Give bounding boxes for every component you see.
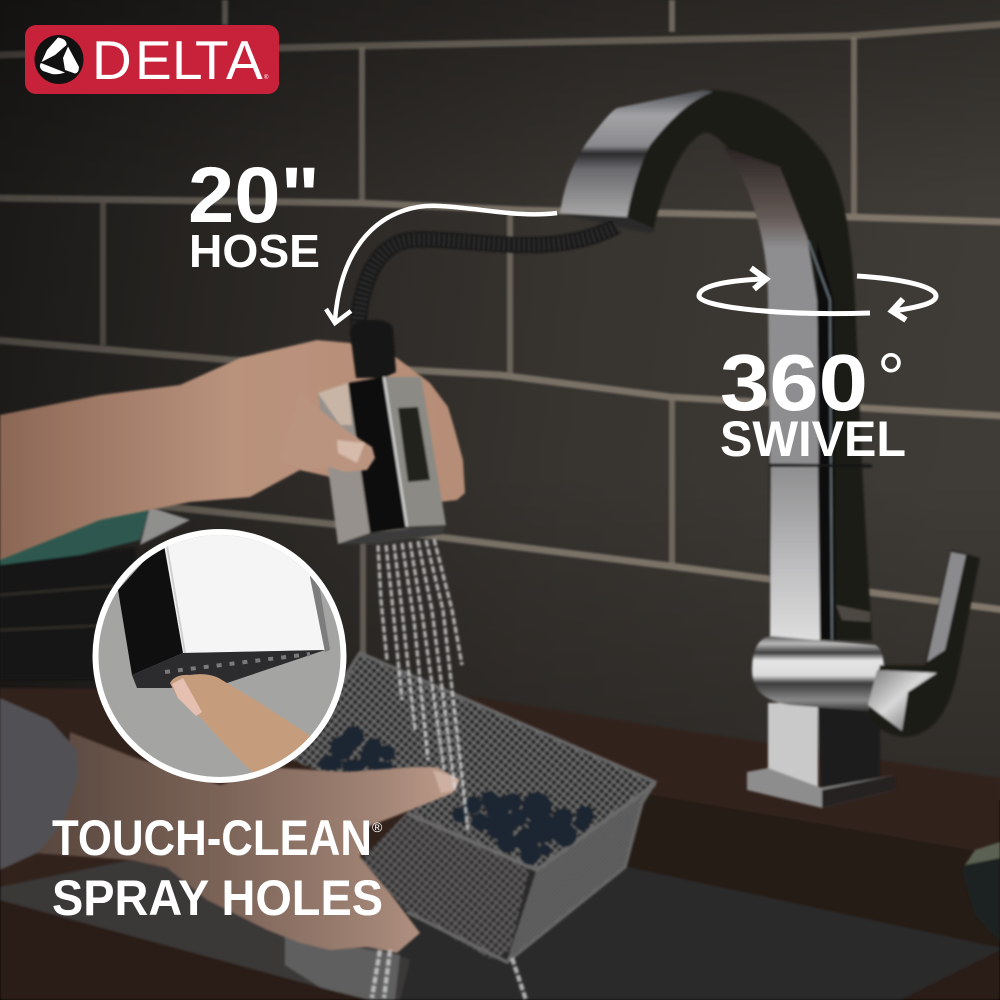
thumb xyxy=(280,392,375,472)
spray head underside xyxy=(132,650,325,688)
finger xyxy=(170,674,310,772)
callout: 360 degree swivel: SWIVEL xyxy=(720,411,906,467)
sleeve xyxy=(0,698,78,870)
thumbnail xyxy=(337,440,365,463)
sprayer nozzle rim xyxy=(338,525,446,544)
tile wall background xyxy=(0,0,1000,800)
fingernail xyxy=(172,678,202,716)
faucet spout head xyxy=(560,90,713,217)
arrow: swivel rotation xyxy=(699,268,936,320)
lower hand xyxy=(33,732,460,953)
arrow: hose reach xyxy=(326,206,557,323)
sprayer black face xyxy=(348,377,407,533)
faucet handle collar xyxy=(868,670,937,731)
wooden counter and sink xyxy=(0,688,1000,1000)
callout: touch-clean spray holes: TOUCH-CLEAN xyxy=(52,810,372,866)
hose xyxy=(358,226,617,325)
callout: touch-clean spray holes: ® xyxy=(372,819,383,835)
sprayer collar xyxy=(350,320,396,378)
Delta logo badge xyxy=(25,25,279,94)
callout: 360 degree swivel: 360 xyxy=(720,338,868,427)
faucet wall reflection xyxy=(836,605,870,622)
spray head dark face xyxy=(118,540,183,675)
logo wordmark: DELTA xyxy=(92,29,263,91)
basket right mesh xyxy=(507,782,655,960)
inset circle: touch-clean spray holes close-up xyxy=(92,520,346,783)
callout: 360 degree swivel: ° xyxy=(877,339,905,417)
bowl at lower right xyxy=(962,842,1000,942)
fingernail xyxy=(433,770,458,793)
faucet lever handle xyxy=(868,550,980,737)
callout: 360 degree swivel xyxy=(720,338,906,467)
callout: touch-clean spray holes: SPRAY HOLES xyxy=(52,870,383,926)
faucet upper chrome band xyxy=(723,147,820,465)
faucet base xyxy=(768,703,818,790)
basket back wall and floor xyxy=(293,653,655,868)
sprayer left chrome face xyxy=(318,383,370,544)
callout: 20 inch hose xyxy=(188,150,320,277)
basket left front mesh xyxy=(360,813,530,960)
callout: 20 inch hose: 20" xyxy=(188,150,320,239)
lower hand with sleeve xyxy=(0,698,460,953)
faucet hub xyxy=(752,636,884,712)
faucet gooseneck arch xyxy=(627,90,872,640)
callout: 20 inch hose: HOSE xyxy=(189,225,320,277)
blueberries xyxy=(318,726,594,865)
faucet lower chrome band xyxy=(770,467,820,640)
faucet xyxy=(560,90,980,808)
sprayer head xyxy=(318,320,446,544)
basket xyxy=(293,653,655,962)
sprayer right gray face xyxy=(383,377,446,527)
spray head bright face xyxy=(165,535,324,653)
background bowls at left xyxy=(0,507,190,680)
upper hand xyxy=(0,340,465,560)
logo mark xyxy=(34,35,84,84)
water spray xyxy=(372,539,526,1000)
callout: touch-clean spray holes xyxy=(52,810,383,926)
registered mark: ® xyxy=(264,74,269,81)
sprayer toggle button xyxy=(398,407,430,482)
